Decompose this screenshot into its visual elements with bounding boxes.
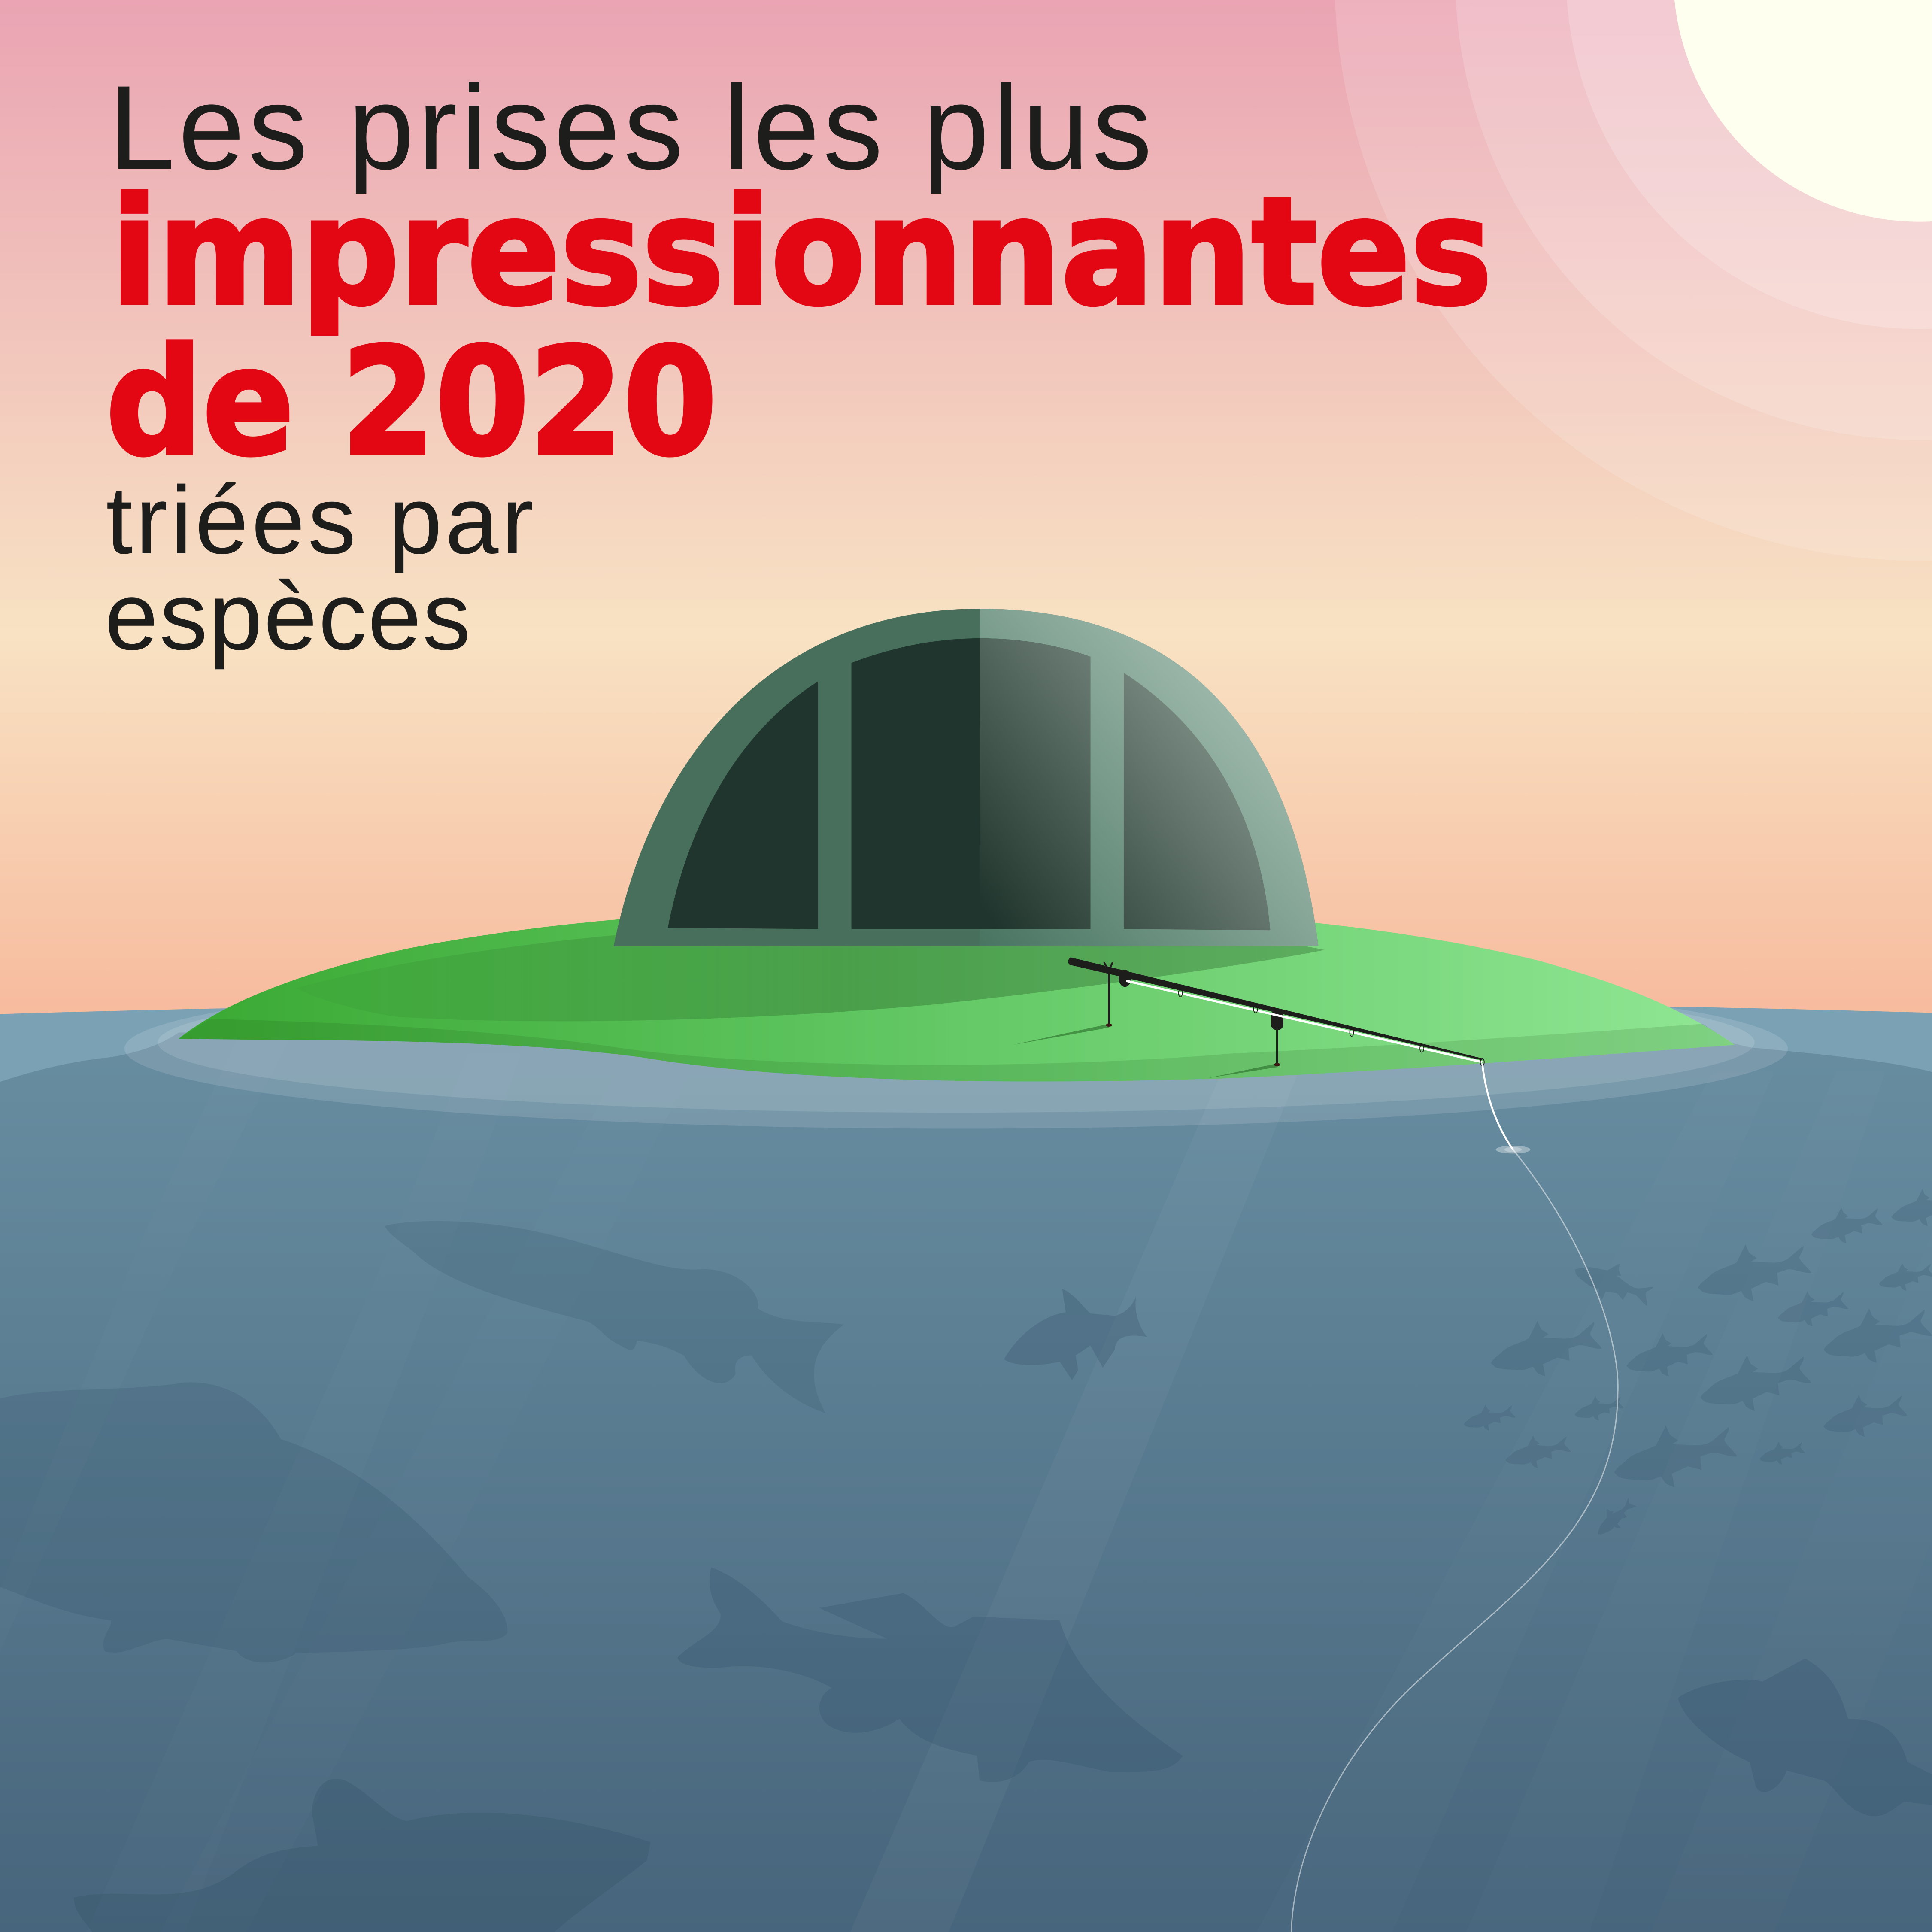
title block xyxy=(105,61,1492,670)
dome shell right highlight xyxy=(980,609,1319,946)
fishing line and bobber xyxy=(1291,1063,1618,1932)
bobber ripple xyxy=(1496,1146,1530,1153)
island xyxy=(179,906,1735,1081)
fish: perch xyxy=(1678,1659,1932,1816)
post feet xyxy=(1106,1024,1112,1027)
water surface far layer xyxy=(0,1003,1932,1232)
grass xyxy=(179,906,1735,1081)
sky background xyxy=(0,0,1932,1023)
subtitle line: triées par: triées par xyxy=(106,467,534,574)
rod blank xyxy=(1068,957,1482,1060)
reel xyxy=(1119,970,1131,987)
line above water xyxy=(1482,1063,1513,1149)
support fork xyxy=(1104,962,1113,971)
fish: bream xyxy=(1004,1289,1147,1380)
fish: bottom black bass xyxy=(74,1779,651,1932)
support posts xyxy=(1109,967,1277,1065)
line under water xyxy=(1291,1149,1618,1932)
rod holder xyxy=(1271,1010,1283,1030)
school of small fish xyxy=(1464,1189,1932,1539)
subtitle line: espèces: espèces xyxy=(105,563,471,670)
dome shadow on grass xyxy=(296,933,1325,1021)
centre window xyxy=(852,638,1090,929)
light rays in water xyxy=(0,1039,1932,1932)
sun with halo rings xyxy=(1335,0,1932,561)
dome shell left xyxy=(614,609,1318,946)
right window xyxy=(1124,673,1271,930)
support shadows xyxy=(1013,1024,1109,1045)
fish: carp xyxy=(0,1382,508,1662)
fish: pike xyxy=(385,1221,844,1413)
title line: Les prises les plus: Les prises les plus xyxy=(109,61,1152,195)
fishing rod on supports xyxy=(1013,957,1484,1078)
title line: impressionnantes: impressionnantes xyxy=(111,166,1492,338)
title line: de 2020: de 2020 xyxy=(106,316,717,488)
fish: zander pair xyxy=(678,1567,1183,1782)
white rod underside xyxy=(1126,981,1482,1062)
rod guides xyxy=(1178,989,1484,1066)
fish silhouettes xyxy=(0,1189,1932,1932)
ripple rings around island xyxy=(124,968,1788,1128)
dome building xyxy=(614,609,1318,946)
centre window reflection xyxy=(980,638,1090,929)
grass front shading xyxy=(179,1019,1735,1081)
water body xyxy=(0,1033,1932,1932)
left window xyxy=(668,681,818,929)
